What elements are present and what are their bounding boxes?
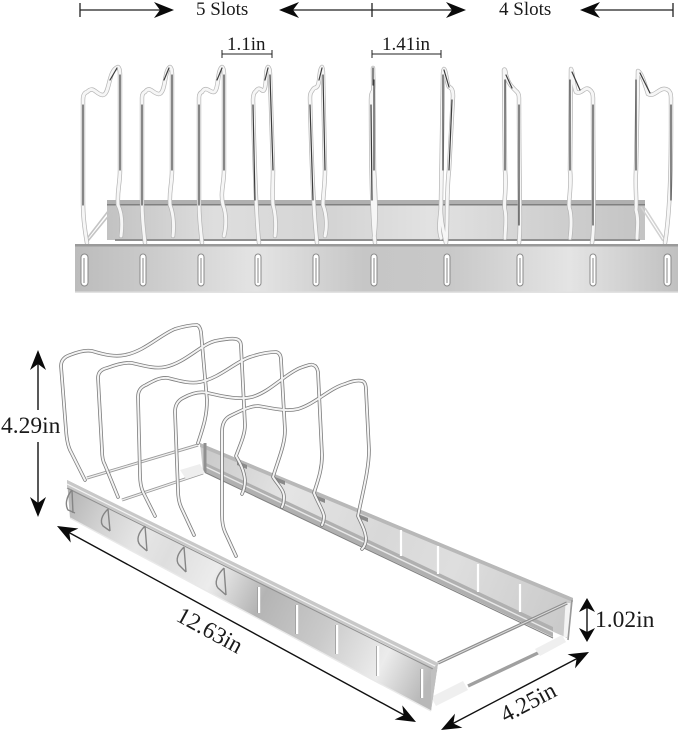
- hooks and slots on near plate: [66, 490, 422, 698]
- dimension: 4.25in width: 4.25in: [496, 677, 561, 728]
- wire dark highlights: [83, 68, 671, 225]
- near side plate: [67, 480, 438, 711]
- top dimension: 4 slots: [372, 0, 673, 20]
- dimension: 12.63in length: [53, 519, 420, 729]
- wire dividers: [83, 67, 671, 243]
- front view rack: [75, 67, 678, 293]
- front plate: [75, 244, 678, 293]
- dimension: 1.1in spacing: [222, 34, 272, 58]
- plastic end caps: [431, 635, 566, 706]
- connecting rods: [87, 445, 567, 686]
- wire dividers: [61, 325, 369, 556]
- perspective rack: [61, 325, 573, 711]
- dimension: 1.1in spacing: 1.1in: [227, 34, 266, 55]
- dimension: 4.29in height: [1, 350, 61, 517]
- back plate: [85, 200, 666, 241]
- top dimension: 5 slots: [80, 0, 372, 20]
- dimension: 1.41in spacing: 1.41in: [382, 34, 431, 55]
- dimension: 1.02in depth: 1.02in: [595, 607, 655, 633]
- plate slots: [81, 254, 671, 286]
- dimension: 4.29in height: 4.29in: [1, 413, 61, 439]
- dimension: 1.41in spacing: [372, 34, 441, 58]
- dimension: 4.25in width: [437, 645, 593, 733]
- far side plate: [200, 443, 573, 640]
- clips on far plate: [237, 461, 368, 522]
- dimension: 12.63in length: 12.63in: [172, 602, 247, 659]
- dimension: 1.02in depth: [579, 598, 655, 642]
